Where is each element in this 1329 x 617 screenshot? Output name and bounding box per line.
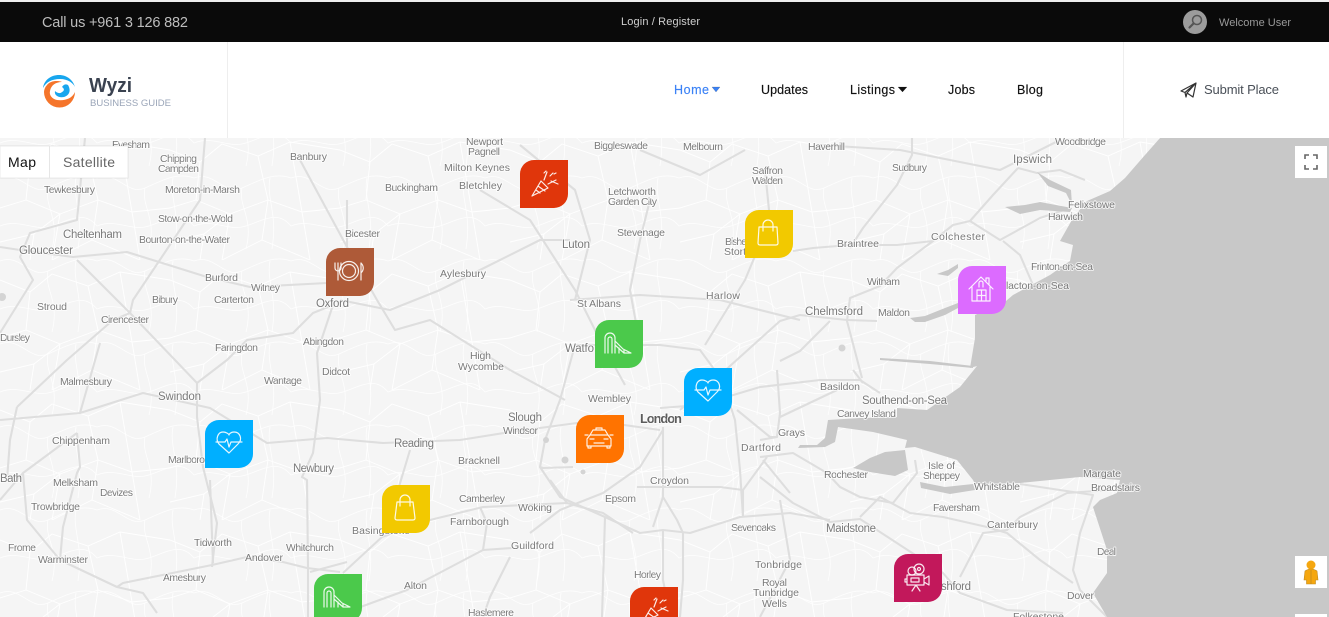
place labels: Basildon — [820, 381, 860, 393]
estuary inlets — [853, 172, 1072, 494]
place labels: Tonbridge — [755, 559, 802, 571]
place labels: Faversham — [933, 502, 980, 514]
place labels: Rochester — [824, 469, 868, 481]
map type control — [0, 146, 128, 178]
place labels: Margate — [1083, 468, 1121, 480]
place labels: Evesham — [112, 139, 150, 151]
phone number: Call us +961 3 126 882 — [42, 15, 188, 31]
place labels: shford — [941, 581, 971, 593]
pin: restaurant — [326, 248, 374, 296]
place labels: Faringdon — [215, 342, 258, 354]
place labels: Chipping — [160, 153, 197, 165]
place labels: Buckingham — [385, 182, 438, 194]
place labels: Wembley — [588, 393, 632, 405]
place labels: Sevenoaks — [731, 522, 776, 534]
place labels: Deal — [1097, 546, 1116, 558]
navigation: Home — [674, 83, 709, 97]
place labels: Devizes — [100, 487, 133, 499]
place labels: Stow-on-the-Wold — [158, 213, 233, 225]
place labels: Guildford — [511, 540, 554, 552]
place labels: St Albans — [577, 298, 621, 310]
sea — [798, 138, 1329, 617]
place labels: Sudbury — [892, 162, 928, 174]
logo: Wyzi — [89, 75, 132, 97]
place labels: Newbury — [293, 463, 334, 475]
place labels: Tunbridge — [753, 587, 799, 599]
pin: playground slide Watford — [595, 320, 643, 368]
place labels: Royal — [762, 577, 787, 589]
place labels: Bishe — [725, 236, 747, 248]
pin: health London — [684, 368, 732, 416]
user avatar — [1183, 10, 1207, 34]
place labels: Slough — [508, 412, 542, 424]
pin: playground slide south — [314, 574, 362, 617]
place labels: Canterbury — [987, 519, 1039, 531]
place labels: Bath — [0, 473, 22, 485]
place labels: Moreton-in-Marsh — [165, 184, 240, 196]
place labels: Oxford — [316, 298, 349, 310]
map type control: Map — [8, 154, 36, 170]
navigation header — [0, 42, 1329, 138]
place labels: Wantage — [264, 375, 302, 387]
place labels: Luton — [562, 239, 590, 251]
site header — [0, 0, 1329, 138]
place labels: London — [640, 411, 682, 426]
place labels: Bicester — [345, 228, 380, 240]
pin: shopping bag Basingstoke — [382, 485, 430, 533]
place labels: Cheltenham — [63, 229, 122, 241]
place labels: Witney — [251, 282, 281, 294]
place labels: Felixstowe — [1068, 199, 1115, 211]
login link: Login / Register — [621, 16, 700, 28]
place labels: Maldon — [878, 307, 910, 319]
place labels: Grays — [778, 427, 805, 439]
place labels: Dartford — [741, 442, 781, 454]
pin: house — [958, 266, 1006, 314]
place labels: Horley — [634, 569, 662, 581]
pin: shopping bag north — [745, 210, 793, 258]
place labels: Frome — [8, 542, 36, 554]
place labels — [0, 136, 1140, 617]
submit place: Submit Place — [1204, 82, 1279, 97]
place labels: Abingdon — [303, 336, 344, 348]
place labels: Isle of — [928, 460, 955, 472]
pin: party popper south — [630, 587, 678, 617]
navigation: Jobs — [948, 83, 975, 97]
pin: taxi — [576, 415, 624, 463]
logo: BUSINESS GUIDE — [90, 98, 171, 109]
place labels: Biggleswade — [594, 140, 648, 152]
navigation — [674, 83, 1043, 97]
place labels: Melksham — [53, 477, 98, 489]
place labels: Aylesbury — [440, 268, 487, 280]
place labels: Braintree — [837, 238, 879, 250]
logo — [43, 75, 171, 109]
top bar — [0, 0, 1329, 42]
place labels: Wycombe — [458, 361, 504, 373]
place labels: Saffron — [752, 165, 783, 177]
place labels: Marlboro — [168, 454, 205, 466]
place labels: Epsom — [605, 493, 636, 505]
place labels: Bourton-on-the-Water — [139, 234, 230, 246]
place labels: Canvey Island — [837, 408, 896, 420]
place labels: Chelmsford — [805, 306, 863, 318]
place labels: Cirencester — [101, 314, 150, 326]
place labels: Warminster — [38, 554, 88, 566]
place labels: Milton Keynes — [444, 162, 510, 174]
place labels: Haverhill — [808, 141, 845, 153]
place labels: High — [470, 350, 491, 362]
place labels: Walden — [752, 175, 783, 187]
lakes — [0, 293, 846, 474]
navigation: Blog — [1017, 83, 1043, 97]
place labels: Amesbury — [163, 572, 207, 584]
place labels: Dover — [1067, 590, 1094, 602]
place labels: Watfo — [565, 343, 594, 355]
place labels: Swindon — [158, 391, 201, 403]
place labels: Whitstable — [974, 481, 1020, 493]
pin: party popper north — [520, 160, 568, 208]
fullscreen button — [1295, 146, 1327, 178]
pin: cinema — [894, 554, 942, 602]
place labels: Wells — [762, 598, 787, 610]
place labels: Harwich — [1048, 211, 1083, 223]
place labels: Harlow — [706, 290, 740, 302]
place labels: Chippenham — [52, 435, 110, 447]
roads — [0, 138, 1110, 617]
place labels: Malmesbury — [60, 376, 113, 388]
place labels: Woking — [518, 502, 552, 514]
map base — [0, 138, 1329, 617]
navigation: Updates — [761, 83, 808, 97]
place labels: Broadstairs — [1091, 482, 1140, 494]
place labels: Frinton-on-Sea — [1031, 261, 1093, 273]
place labels: Garden City — [608, 196, 658, 208]
place labels: Reading — [394, 438, 434, 450]
place labels: Camberley — [459, 493, 506, 505]
place labels: Basingstoke — [352, 525, 410, 537]
place labels: Ipswich — [1013, 154, 1052, 166]
zoom control edge — [1295, 614, 1327, 617]
navigation: Listings — [850, 83, 895, 97]
place labels: Alton — [404, 580, 427, 592]
place labels: Colchester — [931, 231, 986, 243]
place labels: Dursley — [0, 332, 31, 344]
welcome text: Welcome User — [1219, 17, 1291, 29]
place labels: Bibury — [152, 294, 179, 306]
place labels: Letchworth — [608, 186, 656, 198]
place labels: Didcot — [322, 366, 350, 378]
place labels: lacton-on-Sea — [1006, 280, 1069, 292]
place labels: Stort — [724, 246, 746, 258]
place labels: Burford — [205, 272, 238, 284]
place labels: Melbourn — [683, 141, 723, 153]
place labels: Stevenage — [617, 227, 665, 239]
pin: health Marlborough — [205, 420, 253, 468]
place labels: Stroud — [37, 301, 67, 313]
map panel — [0, 138, 1329, 617]
place labels: Sheppey — [923, 470, 961, 482]
place labels: Andover — [245, 552, 284, 564]
place labels: Bletchley — [459, 180, 503, 192]
place labels: Farnborough — [450, 516, 509, 528]
place labels: Campden — [158, 163, 199, 175]
place labels: Pagnell — [468, 146, 500, 158]
place labels: Whitchurch — [286, 542, 334, 554]
place labels: Windsor — [503, 425, 538, 437]
place labels: Witham — [867, 276, 900, 288]
place labels: Maidstone — [826, 523, 876, 535]
map type control: Satellite — [63, 154, 115, 170]
street view pegman button — [1295, 556, 1327, 588]
place labels: Gloucester — [19, 245, 73, 257]
place labels: Bracknell — [458, 455, 500, 467]
place labels: Banbury — [290, 151, 328, 163]
place labels: Carterton — [214, 294, 254, 306]
place labels: Tewkesbury — [44, 184, 96, 196]
place labels: Southend-on-Sea — [862, 395, 948, 407]
place labels: Trowbridge — [31, 501, 80, 513]
place labels: Croydon — [650, 475, 689, 487]
place labels: Tidworth — [194, 537, 232, 549]
